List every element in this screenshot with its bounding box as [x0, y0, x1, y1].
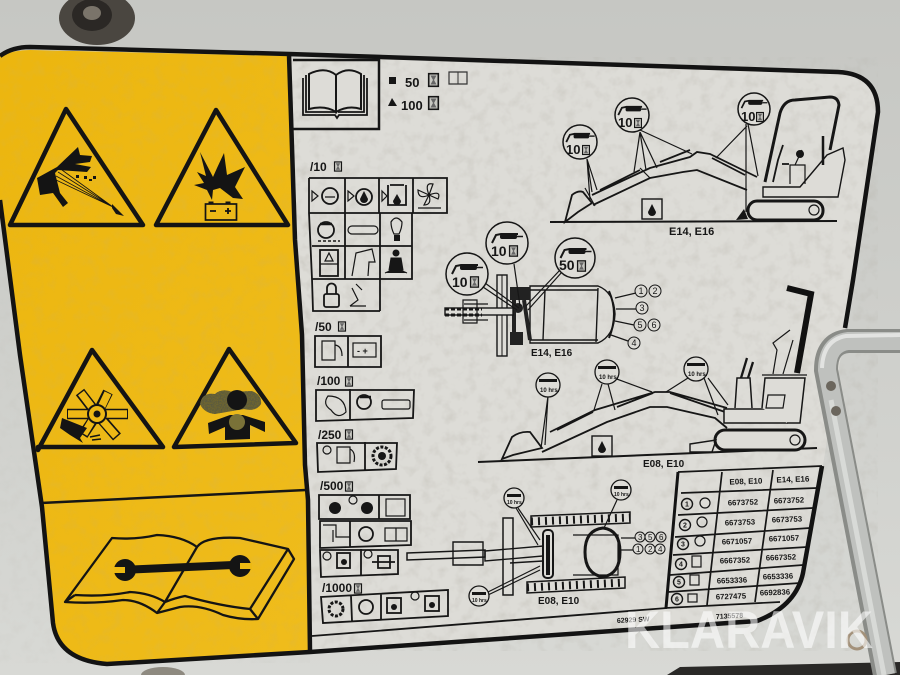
track — [748, 201, 823, 220]
header row — [729, 474, 810, 487]
callout circles: 10 — [741, 109, 755, 124]
callout circles: 10 — [618, 115, 632, 130]
diagram: top view E14, E16: 5 — [638, 320, 643, 330]
diagram: top view E08, E10: 10 hrs. — [507, 500, 524, 506]
service interval /100 — [316, 374, 414, 421]
footer part codes: 62929 SW — [617, 616, 650, 625]
row values — [716, 495, 805, 602]
service interval /1000 — [321, 581, 448, 623]
bolt: top left — [59, 0, 135, 45]
service interval /1000: /1000 — [322, 581, 352, 595]
row icons: 4 — [679, 562, 683, 568]
callout circles — [563, 93, 770, 159]
legend: service symbols: 50 — [405, 75, 419, 90]
table grid — [666, 466, 822, 608]
numbered markers — [633, 532, 666, 554]
leaders — [587, 124, 758, 212]
cab and body — [765, 97, 839, 182]
callout circles: 10 — [566, 142, 580, 157]
numbered markers: 2 — [648, 545, 653, 554]
cab and body — [735, 378, 752, 408]
model label: E08, E10 — [643, 459, 685, 470]
icon: manual book — [293, 60, 379, 129]
dark machine edge: bottom right — [667, 662, 900, 675]
table: part numbers — [666, 466, 822, 608]
diagram: top view E08, E10: 10 hrs. — [614, 492, 631, 498]
diagram: top view E14, E16: 1 — [638, 286, 644, 296]
diagram: top view E14, E16: 10 — [452, 274, 468, 290]
service interval /500: /500 — [320, 479, 344, 493]
row icons: 5 — [677, 580, 681, 586]
callout circles — [446, 253, 488, 295]
warning: fumes and mask — [174, 349, 296, 447]
warning: rotating fan — [38, 350, 163, 450]
row values: 6673753 — [725, 517, 756, 528]
bottom bolt — [141, 667, 185, 675]
row values: 6727475 — [716, 591, 747, 602]
diagram: top view E08, E10 — [407, 480, 666, 607]
service interval /10 — [309, 160, 447, 311]
numbered markers: 6 — [659, 533, 664, 542]
service interval /50 — [315, 320, 381, 367]
diagram: top view E14, E16: E14, E16 — [531, 348, 573, 359]
row values: 6671057 — [722, 536, 752, 547]
diagram: top view E14, E16: 2 — [652, 286, 658, 296]
header row: E08, E10 — [729, 476, 763, 487]
metal grab rail — [822, 335, 900, 675]
diagram: top view E14, E16: 10 — [491, 243, 507, 259]
warning: flying debris — [10, 109, 143, 225]
diagram: side view E08, E10: 10 hrs. — [688, 372, 708, 378]
service interval /500 — [319, 479, 411, 577]
diagram: top view E08, E10: E08, E10 — [538, 596, 580, 607]
row values: 6673753 — [772, 514, 803, 525]
icon: open book with wrench — [65, 535, 294, 619]
boom and arm — [502, 432, 542, 459]
diagram: top view E14, E16: 6 — [652, 320, 657, 330]
footer part codes: 7135578 — [716, 613, 743, 621]
black roll bar — [787, 288, 811, 373]
model label: E14, E16 — [669, 226, 714, 238]
callout circles — [536, 373, 560, 397]
row values: 6653336 — [763, 571, 794, 582]
row icons: 6 — [675, 596, 679, 604]
track — [715, 430, 805, 450]
boom and arm — [565, 191, 592, 222]
service interval /250 — [317, 428, 397, 472]
diagram: side view E08, E10: 10 hrs. — [540, 388, 560, 394]
service interval /50: /50 — [315, 320, 332, 334]
diagram: top view E08, E10: 10 hrs. — [472, 598, 489, 604]
watermark: KLARAVIK: KLARAVIK — [625, 601, 873, 660]
diagram: top view E14, E16: 3 — [640, 303, 645, 313]
diagram: top view E14, E16: 50 — [559, 257, 575, 273]
footer part codes — [617, 613, 743, 625]
service interval /50: - + — [357, 346, 368, 356]
service interval /250: /250 — [318, 428, 342, 442]
legend: service symbols — [388, 72, 467, 113]
service interval /100: /100 — [317, 374, 341, 388]
numbered markers: 1 — [636, 545, 641, 554]
divider line — [41, 490, 306, 503]
diagram: top view E14, E16: 4 — [632, 338, 637, 348]
panel: decal white background — [290, 57, 878, 651]
header row: E14, E16 — [776, 474, 810, 485]
service interval /10: /10 — [310, 160, 327, 174]
diagram: side view E08, E10 — [478, 288, 817, 470]
legend: service symbols: 100 — [401, 98, 423, 113]
row values: 6667352 — [720, 555, 751, 566]
icon: hydraulic oil — [642, 199, 662, 219]
numbered markers: 5 — [648, 533, 653, 542]
numbered markers — [611, 293, 636, 341]
row values: 6671057 — [769, 533, 799, 544]
numbered markers: 3 — [638, 533, 643, 542]
panel: yellow warnings — [0, 50, 310, 663]
row icons: 2 — [683, 522, 687, 530]
diagram: side view E14, E16 — [550, 93, 845, 238]
warning: battery explosion — [156, 110, 288, 225]
row values: 6673752 — [728, 497, 759, 508]
row values: 6692836 — [760, 587, 791, 598]
row icons: 1 — [685, 502, 689, 508]
10 hour grid — [309, 178, 447, 311]
numbered markers: 4 — [658, 545, 663, 554]
row values: 6667352 — [766, 552, 797, 563]
row values: 6673752 — [774, 495, 805, 506]
icon: hydraulic oil — [592, 436, 612, 456]
row icons: 3 — [681, 542, 685, 548]
row values: 6653336 — [717, 575, 748, 586]
row icons — [672, 498, 710, 604]
diagram: side view E08, E10: 10 hrs. — [599, 375, 619, 381]
leaders — [541, 378, 728, 448]
diagram: top view E14, E16 — [445, 222, 661, 359]
callout circles — [504, 488, 524, 508]
